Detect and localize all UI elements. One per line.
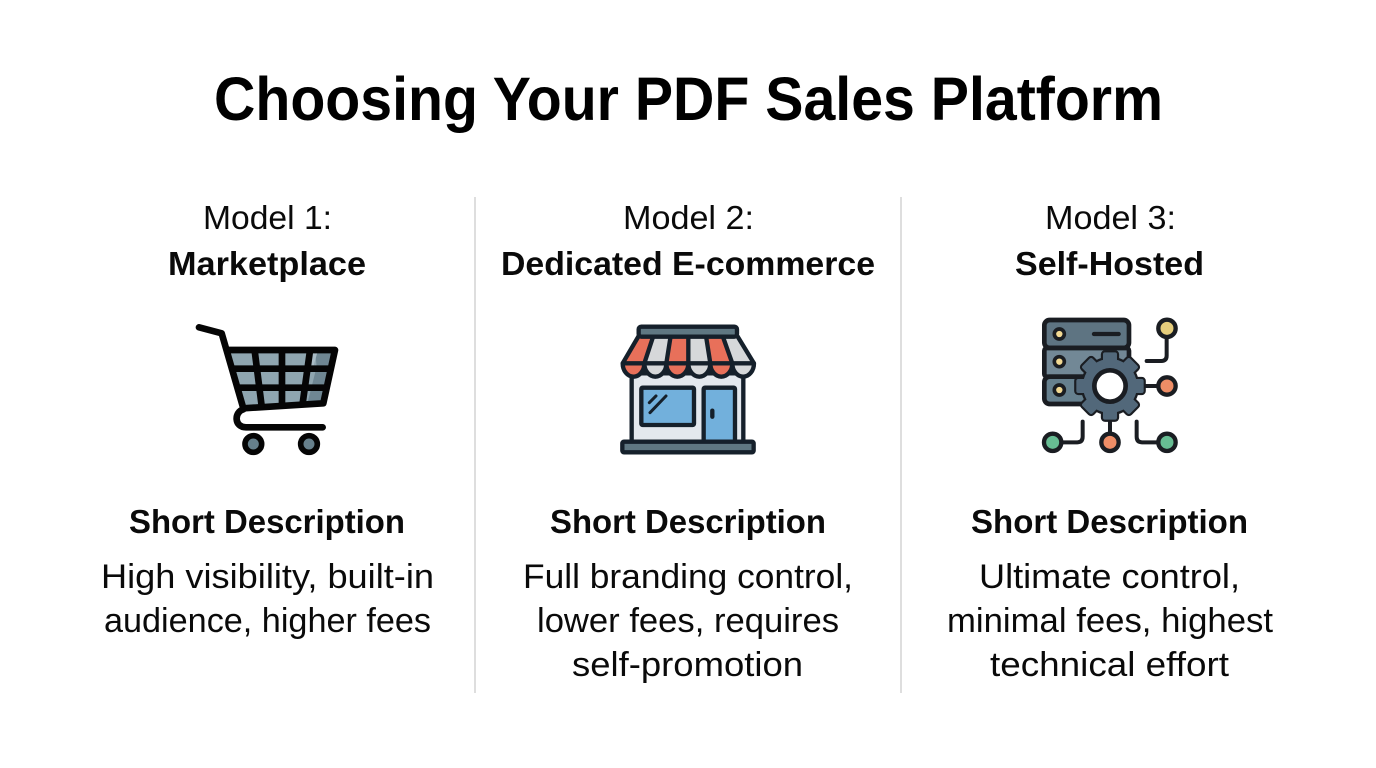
heading: model 1: Model 1: <box>203 199 332 236</box>
text block: marketplace description: High visibility, built-in <box>101 558 434 596</box>
heading: model 1: Marketplace <box>168 245 366 282</box>
text block: marketplace description: audience, higher fees <box>104 602 431 640</box>
text block: self-hosted description: technical effort <box>990 646 1230 684</box>
text block: marketplace description <box>101 558 434 640</box>
heading: model 3: Self-Hosted <box>1015 245 1204 282</box>
subheading: short description: Short Description <box>550 503 826 540</box>
heading: model 2: Dedicated E-commerce <box>501 245 875 282</box>
icon: storefront <box>622 327 754 452</box>
heading: model 2 <box>501 199 875 282</box>
text block: self-hosted description: Ultimate control, <box>979 558 1240 596</box>
text block: e-commerce description: lower fees, requires <box>537 602 839 640</box>
heading: model 3 <box>1015 199 1204 282</box>
text block: e-commerce description: Full branding control, <box>523 558 853 596</box>
subheading: short description: Short Description <box>129 503 405 540</box>
panel: model 2 dedicated e-commerce <box>501 199 875 684</box>
text block: e-commerce description: self-promotion <box>572 646 803 684</box>
panel: model 3 self-hosted <box>947 199 1274 684</box>
text block: self-hosted description <box>947 558 1274 684</box>
icon: shopping cart <box>199 327 335 452</box>
text block: self-hosted description: minimal fees, highest <box>947 602 1274 640</box>
text block: e-commerce description <box>523 558 853 684</box>
heading: model 3: Model 3: <box>1045 199 1176 236</box>
heading: model 1 <box>168 199 366 282</box>
panel: model 1 marketplace <box>101 199 434 640</box>
heading: model 2: Model 2: <box>623 199 754 236</box>
icon: server with gear and network nodes <box>1044 320 1176 451</box>
title: Choosing Your PDF Sales Platform <box>214 65 1163 133</box>
subheading: short description: Short Description <box>971 503 1248 540</box>
